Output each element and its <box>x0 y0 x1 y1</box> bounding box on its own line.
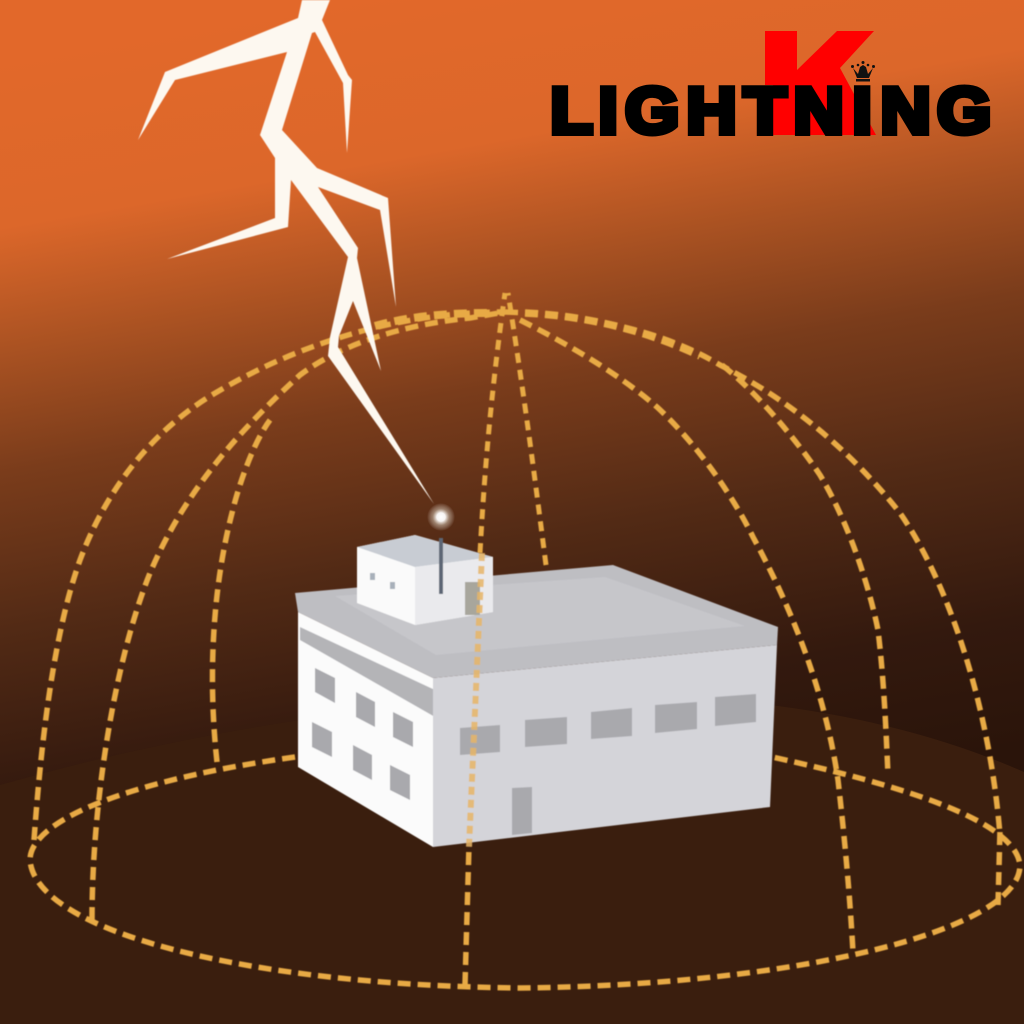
windows <box>312 668 756 835</box>
logo K <box>765 31 876 135</box>
logo wordmark: LIGHTNING <box>550 75 991 147</box>
logo crown <box>851 61 875 82</box>
roof <box>295 565 778 678</box>
left inner meridian <box>92 312 505 920</box>
building <box>295 535 778 847</box>
front meridian lower <box>465 846 469 985</box>
front wall <box>433 645 777 847</box>
box windows <box>370 573 375 580</box>
left wall <box>298 612 433 847</box>
rooftop box <box>357 535 493 625</box>
far right meridian <box>722 365 888 775</box>
thick dashes at dome crown right <box>525 313 700 356</box>
ground <box>0 695 1024 1024</box>
roof inner surface <box>335 577 745 655</box>
far left meridian <box>212 420 270 762</box>
lightning rod <box>439 538 443 594</box>
outer meridian left <box>34 312 505 840</box>
box shaded patch <box>465 582 480 615</box>
dome dashed cage <box>30 293 1020 988</box>
lightning bolt <box>138 0 434 504</box>
thick dashes at dome crown left <box>375 313 490 326</box>
outer meridian right <box>505 312 1000 835</box>
rod glow <box>427 503 455 531</box>
front dashed line over building <box>469 553 482 847</box>
logo <box>550 31 991 147</box>
right inner meridian <box>520 320 853 952</box>
back meridian <box>508 293 546 565</box>
right edge <box>998 830 1000 905</box>
left wall grey band <box>300 627 435 717</box>
base ring <box>30 757 1020 988</box>
front meridian upper <box>480 293 505 553</box>
